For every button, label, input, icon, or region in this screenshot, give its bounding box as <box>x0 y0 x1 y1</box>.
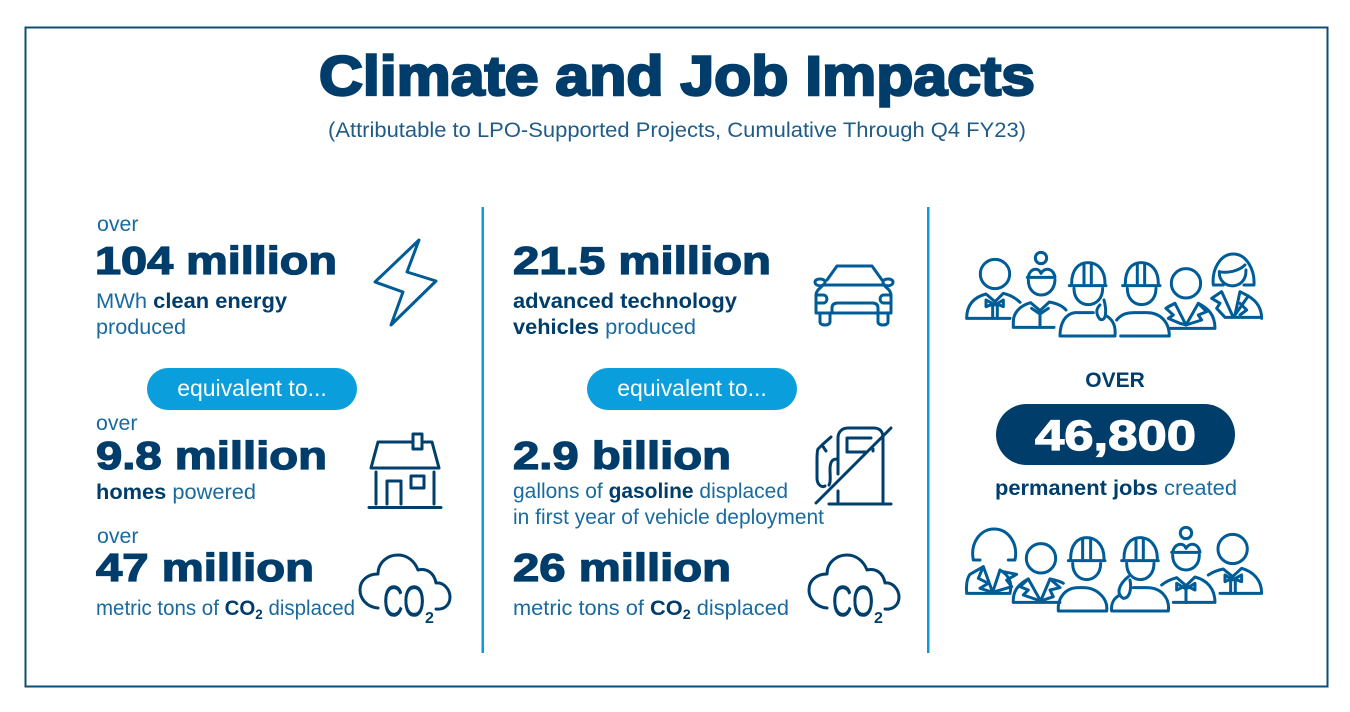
text: permanent jobs created: permanent jobs created <box>995 476 1237 500</box>
stat: 26 million CO2 <box>513 547 789 622</box>
stat: 2.9 billion gasoline: gallons of gasoline displaced <box>513 479 788 503</box>
icon: house <box>369 434 441 508</box>
stat: 47 million CO2: metric tons of CO <box>96 596 257 620</box>
stat: 9.8 million homes <box>96 411 327 504</box>
stat: 2.9 billion gasoline: 2.9 billion <box>513 435 731 478</box>
stat: 21.5 million vehicles: 21.5 million <box>513 240 771 283</box>
column divider left <box>482 207 484 653</box>
column divider right <box>927 207 930 653</box>
stat: 9.8 million homes: 9.8 million <box>96 435 327 478</box>
title: Climate and Job Impacts <box>319 44 1035 107</box>
icon: CO2 cloud left <box>360 555 450 627</box>
stat: 104 million clean energy: produced <box>96 315 186 339</box>
text: OVER: OVER <box>1085 369 1145 392</box>
icon: CO2 cloud middle: CO <box>832 577 874 626</box>
icon: CO2 cloud left: CO <box>383 577 425 626</box>
stat: 47 million CO2 <box>96 524 355 622</box>
pill: equivalent to left <box>147 368 357 410</box>
pill: 46,800 <box>996 404 1235 465</box>
stat: 9.8 million homes: homes powered <box>96 480 256 504</box>
icon: workers group top <box>967 252 1262 336</box>
icon: CO2 cloud left: 2 <box>425 610 434 627</box>
stat: 2.9 billion gasoline <box>513 435 824 529</box>
pill: 46,800: 46,800 <box>1035 412 1196 460</box>
pill: equivalent to middle: equivalent to... <box>617 375 767 401</box>
stat: 47 million CO2: 47 million <box>96 547 314 590</box>
icon: lightning bolt <box>375 240 436 325</box>
stat: 26 million CO2: 2 <box>683 606 691 622</box>
stat: 47 million CO2: displaced <box>263 596 355 620</box>
stat: 26 million CO2: 26 million <box>513 547 731 590</box>
stat: 2.9 billion gasoline: in first year of vehicle deployment <box>513 505 824 529</box>
icon: gas pump crossed out <box>816 428 891 504</box>
stat: 26 million CO2: metric tons of CO <box>513 596 682 620</box>
stat: 104 million clean energy: over <box>97 212 138 236</box>
stat: 104 million clean energy <box>95 212 337 339</box>
stat: 9.8 million homes: over <box>96 411 137 435</box>
icon: car <box>815 266 893 325</box>
pill: equivalent to middle <box>587 368 797 410</box>
stat: 104 million clean energy: 104 million <box>95 240 337 283</box>
stat: 21.5 million vehicles: advanced technology <box>513 289 737 313</box>
stat: 47 million CO2: over <box>97 524 138 548</box>
stat: 21.5 million vehicles <box>513 240 771 339</box>
icon: CO2 cloud middle: 2 <box>874 610 883 627</box>
stat: 104 million clean energy: MWh clean energy <box>96 289 287 313</box>
stat: 47 million CO2: 2 <box>255 606 263 622</box>
stat: 26 million CO2: displaced <box>691 596 789 620</box>
icon: CO2 cloud middle <box>809 555 899 627</box>
pill: equivalent to left: equivalent to... <box>177 375 327 401</box>
subtitle: (Attributable to LPO-Supported Projects, Cumulative Through Q4 FY23) <box>328 119 1026 142</box>
stat: 21.5 million vehicles: vehicles produced <box>513 315 696 339</box>
icon: workers group bottom <box>966 527 1262 611</box>
